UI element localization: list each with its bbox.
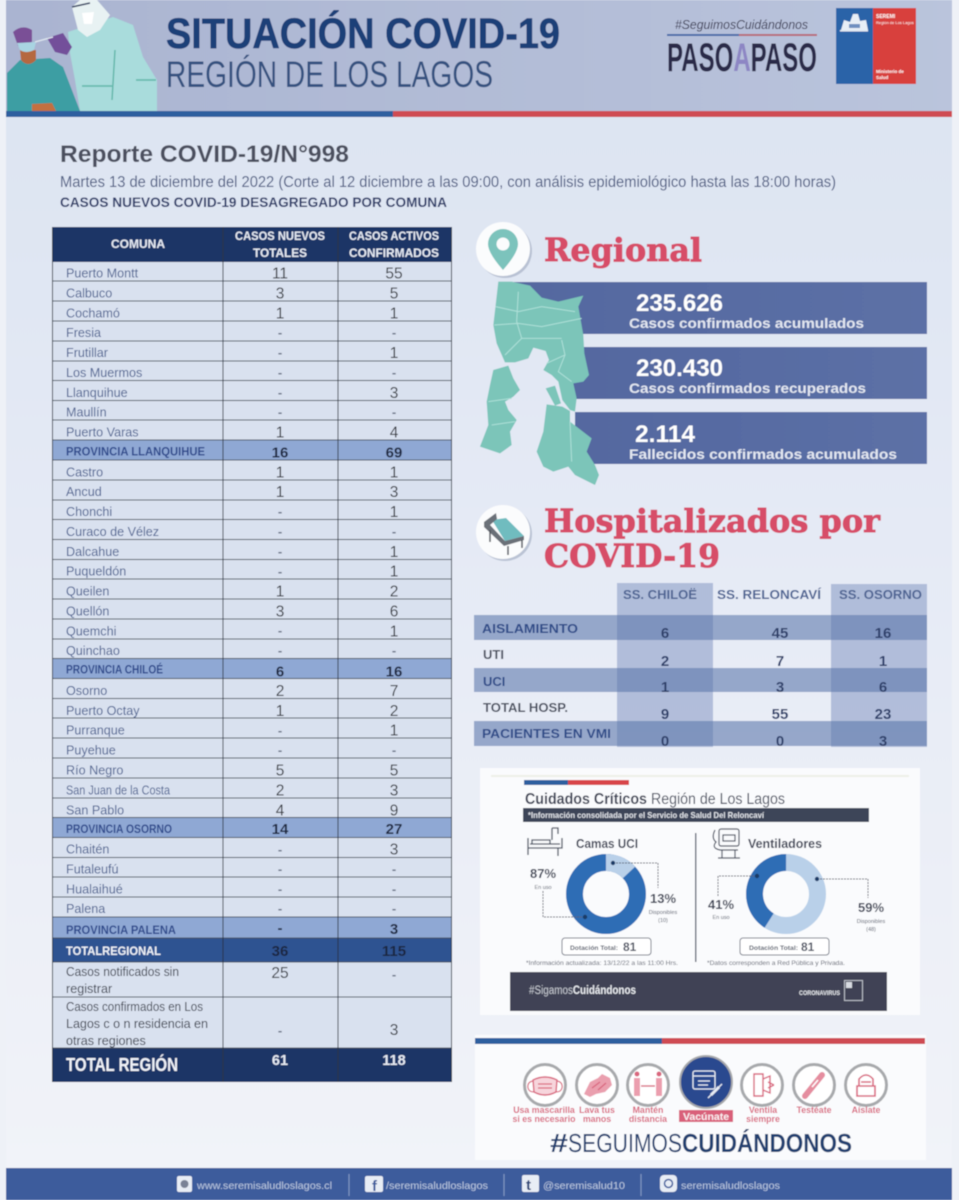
stat: casos confirmados acumulados: Casos confirmados acumulados <box>629 315 864 331</box>
row: Provincia Chiloé <box>52 659 452 680</box>
link: sitio web <box>177 1176 332 1192</box>
rows: provincia Chiloé: Chonchi <box>66 505 112 519</box>
stat: casos confirmados acumulados <box>513 282 927 334</box>
labels: medidas <box>512 1105 881 1124</box>
icon: aislamiento <box>846 1064 886 1106</box>
note bar <box>523 808 869 822</box>
logo: Ministerio de Salud: SEREMI <box>876 14 896 20</box>
row: UCI <box>483 674 887 696</box>
stat: fallecidos confirmados acumulados: 2.114 <box>635 421 696 448</box>
row: aislamiento: 45 <box>772 625 788 642</box>
row: aislamiento <box>482 621 891 642</box>
rows: provincia Chiloé: 1 <box>390 504 398 521</box>
row: casos con residencia en otras regiones <box>52 997 452 1048</box>
labels: medidas: si es necesario <box>512 1114 576 1124</box>
hashtag: seguimos cuidándonos <box>550 1128 852 1158</box>
row: Total regional: 36 <box>272 943 288 960</box>
row: total hosp: TOTAL HOSP. <box>483 700 568 715</box>
rows: provincia Osorno: 1 <box>390 723 398 740</box>
panel: regional stats <box>513 282 927 464</box>
row: Total región <box>52 1048 452 1082</box>
logo: Ministerio de Salud: Región de Los Lagos <box>876 20 914 25</box>
report heading <box>60 141 836 210</box>
row: casos notificados sin registrar <box>52 962 452 997</box>
rows: provincia Llanquihue: - <box>392 325 396 340</box>
box: dotación total camas: Dotación Total: <box>570 945 618 952</box>
rows: provincia Chiloé: 1 <box>276 584 284 601</box>
row: Provincia Osorno: PROVINCIA OSORNO <box>66 824 172 836</box>
icon: ventilator <box>713 829 740 858</box>
donut: ventiladores: 59% <box>858 900 884 915</box>
row: Provincia Llanquihue <box>52 440 452 462</box>
row: total hosp <box>483 700 891 723</box>
rows: provincia Osorno: 1 <box>276 703 284 720</box>
link: facebook <box>365 1176 488 1195</box>
donut: camas UCI: En uso <box>534 885 552 891</box>
row: casos notificados sin registrar: 25 <box>271 965 289 982</box>
labels: medidas: Vacúnate <box>683 1111 729 1123</box>
stat: casos confirmados recuperados: 230.430 <box>636 355 723 382</box>
row: total hosp: 23 <box>875 706 891 723</box>
donut: ventiladores: 41% <box>708 897 734 912</box>
link: twitter: t <box>526 1177 531 1194</box>
report heading: Reporte COVID-19/N°998 <box>60 141 349 168</box>
row: Total regional: TOTALREGIONAL <box>66 944 161 958</box>
table header: CASOS NUEVOS <box>235 229 325 243</box>
rows: provincia Palena: - <box>392 901 396 916</box>
rows: provincia Chiloé: - <box>278 643 282 658</box>
rows: provincia Osorno: 5 <box>276 762 284 780</box>
rows: provincia Llanquihue: Calbuco <box>66 286 112 300</box>
row: UTI: 7 <box>776 653 784 670</box>
rows: provincia Chiloé <box>66 464 398 658</box>
labels: medidas: manos <box>583 1114 611 1124</box>
row: Provincia Chiloé: PROVINCIA CHILOÉ <box>66 664 163 676</box>
row: Provincia Chiloé: 16 <box>386 664 402 680</box>
icon: ventilación <box>742 1064 782 1106</box>
icon: distancia <box>628 1064 668 1106</box>
row: casos notificados sin registrar: registrar <box>66 982 112 996</box>
rows: provincia Palena: Chaitén <box>66 842 109 856</box>
rows: provincia Osorno: 2 <box>276 683 284 700</box>
link: instagram <box>660 1175 780 1192</box>
rows: provincia Llanquihue: Puerto Montt <box>66 266 139 280</box>
rows: provincia Chiloé: Quinchao <box>66 644 120 658</box>
stat: casos confirmados recuperados <box>573 347 927 399</box>
rows: provincia Chiloé: 1 <box>390 564 398 581</box>
row: UCI: 3 <box>776 679 784 696</box>
rows: provincia Chiloé: - <box>392 524 396 539</box>
footer bar: sigamos cuidándonos: CORONAVIRUS <box>799 991 840 997</box>
rows: provincia Chiloé: Dalcahue <box>66 545 119 559</box>
rows: provincia Osorno: Río Negro <box>66 764 123 778</box>
row: pacientes en VMI: 0 <box>661 733 669 750</box>
rows: provincia Osorno: 2 <box>276 782 284 799</box>
rows: provincia Llanquihue: Maullín <box>66 406 107 420</box>
donut: ventiladores: En uso <box>712 915 730 921</box>
row: pacientes en VMI: PACIENTES EN VMI <box>482 726 611 741</box>
rows: provincia Osorno: San Pablo <box>66 803 124 817</box>
icon: testeo <box>794 1064 834 1106</box>
stat: casos confirmados acumulados: 235.626 <box>636 290 723 317</box>
logo: Paso a Paso: PASOAPASO <box>667 36 817 80</box>
rows: provincia Palena: Futaleufú <box>66 862 119 876</box>
rows: provincia Osorno: 5 <box>390 762 398 780</box>
rows: provincia Chiloé: 2 <box>390 584 398 601</box>
hashtag: seguimos cuidándonos: SEGUIMOS <box>568 1128 682 1158</box>
row: UTI: UTI <box>483 647 504 662</box>
table: hospitalizados <box>474 583 927 750</box>
icon: mascarilla <box>524 1064 566 1106</box>
rows: provincia Palena: - <box>392 861 396 876</box>
row: total hosp: 55 <box>772 706 788 723</box>
rows: provincia Llanquihue: 1 <box>390 305 398 322</box>
rows: provincia Chiloé: 1 <box>276 464 284 481</box>
row: Provincia Osorno: 14 <box>272 821 289 838</box>
row: Provincia Osorno: 27 <box>386 821 402 838</box>
row: aislamiento: AISLAMIENTO <box>482 621 578 636</box>
table header: CONFIRMADOS <box>349 246 439 260</box>
row: pacientes en VMI <box>482 726 887 750</box>
rows: provincia Chiloé: - <box>278 504 282 519</box>
rows: provincia Chiloé: - <box>278 544 282 559</box>
row: Provincia Palena: 3 <box>390 921 398 938</box>
donut: camas UCI <box>530 861 677 926</box>
row: Total región: TOTAL REGIÓN <box>66 1054 178 1075</box>
row: aislamiento: 6 <box>661 625 669 642</box>
table header: TOTALES <box>253 246 307 260</box>
table header <box>52 227 452 262</box>
row: Provincia Chiloé: 6 <box>276 664 284 680</box>
column headers <box>623 587 922 602</box>
table header: COMUNA <box>111 237 165 251</box>
donut: ventiladores: Disponibles <box>857 919 885 925</box>
row: Provincia Llanquihue: PROVINCIA LLANQUIHUE <box>66 446 205 458</box>
rows: provincia Chiloé: Quemchi <box>66 624 116 638</box>
rows: provincia Chiloé: 1 <box>390 464 398 481</box>
rows: provincia Llanquihue: - <box>392 365 396 380</box>
link: twitter <box>522 1175 625 1194</box>
icon: hospital bed <box>476 505 532 561</box>
link: facebook: /seremisaludloslagos <box>386 1180 488 1192</box>
box: dotación total ventiladores <box>740 938 829 955</box>
rows: provincia Palena <box>66 842 398 916</box>
report heading: CASOS NUEVOS COVID-19 DESAGREGADO POR COMUNA <box>60 194 447 210</box>
rows: provincia Chiloé: 1 <box>276 484 284 501</box>
rows: provincia Osorno: 9 <box>390 802 398 819</box>
rows: provincia Osorno: - <box>278 723 282 738</box>
rows: provincia Chiloé: - <box>278 623 282 638</box>
rows: provincia Palena: Palena <box>66 902 105 916</box>
rows: provincia Chiloé: 3 <box>390 484 398 501</box>
link: sitio web: www.seremisaludloslagos.cl <box>196 1180 332 1192</box>
rows: provincia Chiloé: 1 <box>390 623 398 640</box>
row: Total región: 61 <box>272 1053 288 1069</box>
rows: provincia Llanquihue: - <box>278 405 282 420</box>
rows: provincia Osorno <box>66 683 398 819</box>
labels: medidas: Mantén <box>633 1105 663 1115</box>
icon: vacunación <box>680 1056 732 1108</box>
rows: provincia Llanquihue: - <box>278 345 282 360</box>
rows: provincia Llanquihue: 4 <box>390 424 399 442</box>
note: red pública y privada: *Datos corresponden a Red Pública y Privada. <box>707 961 845 967</box>
box: dotación total ventiladores: Dotación Total: <box>749 945 798 952</box>
table: casos por comuna <box>52 227 452 1082</box>
rows: provincia Llanquihue: 1 <box>276 424 284 442</box>
panel: medidas de cuidado <box>475 1035 926 1160</box>
rows: provincia Osorno: 2 <box>390 703 398 720</box>
row: Provincia Palena: - <box>278 920 282 937</box>
rows: provincia Llanquihue: Cochamó <box>66 306 120 320</box>
rows: provincia Osorno: Purranque <box>66 724 125 738</box>
rows: provincia Osorno: San Juan de la Costa <box>66 783 170 797</box>
row: UCI: 1 <box>661 679 669 696</box>
title: SITUACIÓN COVID-19 <box>166 9 560 58</box>
row: pacientes en VMI: 0 <box>776 733 784 750</box>
rows: provincia Llanquihue: - <box>278 365 282 380</box>
heading: Hospitalizados por COVID-19: COVID-19 <box>544 537 720 575</box>
illustration: health workers <box>7 0 157 111</box>
row: casos con residencia en otras regiones: otras regiones <box>66 1034 146 1048</box>
rows: provincia Osorno: 4 <box>276 802 285 819</box>
row: Provincia Palena: PROVINCIA PALENA <box>66 925 176 937</box>
link: facebook: f <box>372 1178 378 1195</box>
row: UTI: 1 <box>879 653 887 670</box>
rows: provincia Llanquihue: Fresia <box>66 326 101 340</box>
map: Región de Los Lagos <box>480 282 599 485</box>
heading: cuidados críticos: Región de Los Lagos <box>651 791 785 808</box>
row: UTI <box>483 647 887 670</box>
subtitle: REGIÓN DE LOS LAGOS <box>166 54 493 95</box>
labels: medidas: Testéate <box>796 1105 832 1115</box>
heading: Hospitalizados por COVID-19 <box>544 502 881 575</box>
row: UCI: 6 <box>879 679 887 696</box>
column headers: SS. OSORNO <box>839 588 922 602</box>
icon: location pin <box>476 222 532 278</box>
labels: medidas: Lava tus <box>579 1105 615 1115</box>
row: Total región: 118 <box>382 1053 406 1069</box>
rows: provincia Palena: 3 <box>390 842 398 858</box>
donut: camas UCI: 87% <box>530 866 556 881</box>
rows: provincia Llanquihue: Llanquihue <box>66 386 128 400</box>
rows: provincia Llanquihue: Los Muermos <box>66 366 142 380</box>
rows: provincia Palena: Hualaihué <box>66 882 123 896</box>
header banner <box>6 0 952 117</box>
donut: camas UCI: 13% <box>650 891 676 906</box>
note bar: *Información consolidada por el Servicio de Salud Del Reloncaví <box>528 810 765 820</box>
row: casos con residencia en otras regiones: Casos confirmados en Los <box>66 1000 203 1014</box>
row: Provincia Osorno <box>52 818 452 838</box>
hashtag: seguimos cuidándonos: # <box>550 1128 569 1158</box>
row: casos notificados sin registrar: - <box>392 967 396 982</box>
rows: provincia Osorno: - <box>392 743 396 758</box>
rows: provincia Osorno: - <box>278 743 282 758</box>
rows: provincia Chiloé: - <box>278 524 282 539</box>
row: UCI: UCI <box>483 674 505 689</box>
footer: redes sociales <box>6 1168 952 1200</box>
rows: provincia Chiloé: 3 <box>276 604 284 620</box>
rows: provincia Chiloé: - <box>278 564 282 579</box>
heading: Hospitalizados por COVID-19: Hospitalizados por <box>544 502 881 540</box>
rows: provincia Llanquihue: 3 <box>390 385 398 402</box>
rows: provincia Palena: - <box>392 881 396 896</box>
rows: provincia Chiloé: - <box>392 643 396 658</box>
rows: provincia Palena: - <box>278 842 282 857</box>
logo: Ministerio de Salud: Ministerio de <box>876 69 904 74</box>
table header: CASOS ACTIVOS <box>349 229 439 243</box>
rows: provincia Llanquihue: 1 <box>276 305 284 322</box>
stat: casos confirmados recuperados: Casos confirmados recuperados <box>629 380 866 396</box>
rows: provincia Osorno: 7 <box>390 683 398 700</box>
row: casos con residencia en otras regiones: Lagos c o n residencia en <box>66 1017 208 1031</box>
footer bar: sigamos cuidándonos: #SigamosCuidándonos <box>529 985 636 997</box>
donut: camas UCI: (10) <box>658 918 668 924</box>
rows: provincia Llanquihue <box>66 266 403 442</box>
rows: provincia Llanquihue: Frutillar <box>66 346 108 360</box>
row: Total regional: 115 <box>382 943 406 960</box>
footer bar: sigamos cuidándonos <box>510 972 887 1011</box>
rows: provincia Llanquihue: - <box>392 405 396 420</box>
rows: provincia Llanquihue: 5 <box>390 285 398 302</box>
rows: provincia Chiloé: Ancud <box>66 485 102 499</box>
box: dotación total camas: 81 <box>623 940 637 954</box>
rows: provincia Chiloé: 1 <box>390 544 398 561</box>
labels: medidas: distancia <box>629 1114 667 1124</box>
icon: ICU bed <box>528 828 562 856</box>
panel: cuidados críticos <box>480 768 920 1015</box>
heading: Camas UCI: Camas UCI <box>576 836 638 851</box>
labels: medidas: Ventila <box>749 1105 777 1115</box>
rows: provincia Llanquihue: 11 <box>272 266 288 282</box>
row: Provincia Palena <box>52 917 452 938</box>
logo: Paso a Paso: #SeguimosCuidándonos <box>675 17 808 32</box>
box: dotación total camas <box>562 938 651 955</box>
row: pacientes en VMI: 3 <box>879 733 887 750</box>
rows: provincia Chiloé: Castro <box>66 465 103 479</box>
row: aislamiento: 16 <box>875 625 891 642</box>
labels: medidas: Usa mascarilla <box>513 1105 575 1115</box>
row: Total regional <box>52 938 452 962</box>
rows: provincia Llanquihue: 55 <box>385 266 403 282</box>
header stripe <box>6 111 952 117</box>
heading: Ventiladores: Ventiladores <box>748 836 822 851</box>
column headers: SS. CHILOË <box>623 587 697 602</box>
logo: Paso a Paso <box>667 17 817 80</box>
heading: cuidados críticos <box>525 791 785 808</box>
row: total hosp: 9 <box>661 706 669 723</box>
rows: provincia Chiloé: Curaco de Vélez <box>66 525 159 539</box>
row: Provincia Llanquihue: 16 <box>272 444 288 462</box>
logo: Ministerio de Salud <box>836 8 916 84</box>
rows: provincia Palena: - <box>278 901 282 916</box>
logo: Ministerio de Salud: Salud <box>876 75 889 80</box>
rows: provincia Llanquihue: 3 <box>276 285 284 302</box>
box: dotación total ventiladores: 81 <box>801 940 815 954</box>
report heading: Martes 13 de diciembre del 2022 (Corte al 12 diciembre a las 09:00, con análisis epidemiológico hasta las 18:00 horas) <box>60 174 836 191</box>
row: Provincia Llanquihue: 69 <box>386 444 402 462</box>
labels: medidas: siempre <box>746 1114 780 1124</box>
rows: provincia Chiloé: Quellón <box>66 604 109 618</box>
stat: fallecidos confirmados acumulados <box>575 412 927 464</box>
link: instagram: seremisaludloslagos <box>681 1180 780 1192</box>
rows: provincia Chiloé: 6 <box>390 604 398 620</box>
row: UTI: 2 <box>661 653 669 670</box>
link: twitter: @seremisalud10 <box>543 1180 625 1192</box>
rows: provincia Chiloé: Queilen <box>66 585 109 599</box>
rows: provincia Osorno: Osorno <box>66 684 107 698</box>
stat: fallecidos confirmados acumulados: Fallecidos confirmados acumulados <box>629 446 897 462</box>
rows: provincia Llanquihue: - <box>278 385 282 400</box>
heading: Regional: Regional <box>544 231 702 269</box>
donut: ventiladores <box>708 851 885 937</box>
rows: provincia Osorno: 3 <box>390 782 398 799</box>
row: casos con residencia en otras regiones: 3 <box>390 1022 398 1039</box>
row: casos con residencia en otras regiones: - <box>278 1023 282 1038</box>
rows: provincia Palena: - <box>278 881 282 896</box>
heading: cuidados críticos: Cuidados Críticos <box>525 791 647 808</box>
donut: ventiladores: (48) <box>866 927 876 933</box>
rows: provincia Osorno: Puerto Octay <box>66 704 140 718</box>
donut: camas UCI: Disponibles <box>649 910 677 916</box>
note: información actualizada: *Información actualizada: 13/12/22 a las 11:00 Hrs. <box>526 961 678 967</box>
column headers: SS. RELONCAVÍ <box>717 587 822 602</box>
rows: provincia Llanquihue: Puerto Varas <box>66 426 139 440</box>
icon: lavado de manos <box>576 1064 618 1106</box>
rows: provincia Palena: - <box>278 861 282 876</box>
rows: provincia Osorno: Puyehue <box>66 744 116 758</box>
rows: provincia Chiloé: Puqueldón <box>66 565 126 579</box>
hashtag: seguimos cuidándonos: CUIDÁNDONOS <box>682 1128 852 1158</box>
row: casos notificados sin registrar: Casos notificados sin <box>66 965 179 979</box>
rows: provincia Llanquihue: 1 <box>390 345 398 362</box>
labels: medidas: Aíslate <box>852 1105 881 1115</box>
rows: provincia Llanquihue: - <box>278 325 282 340</box>
